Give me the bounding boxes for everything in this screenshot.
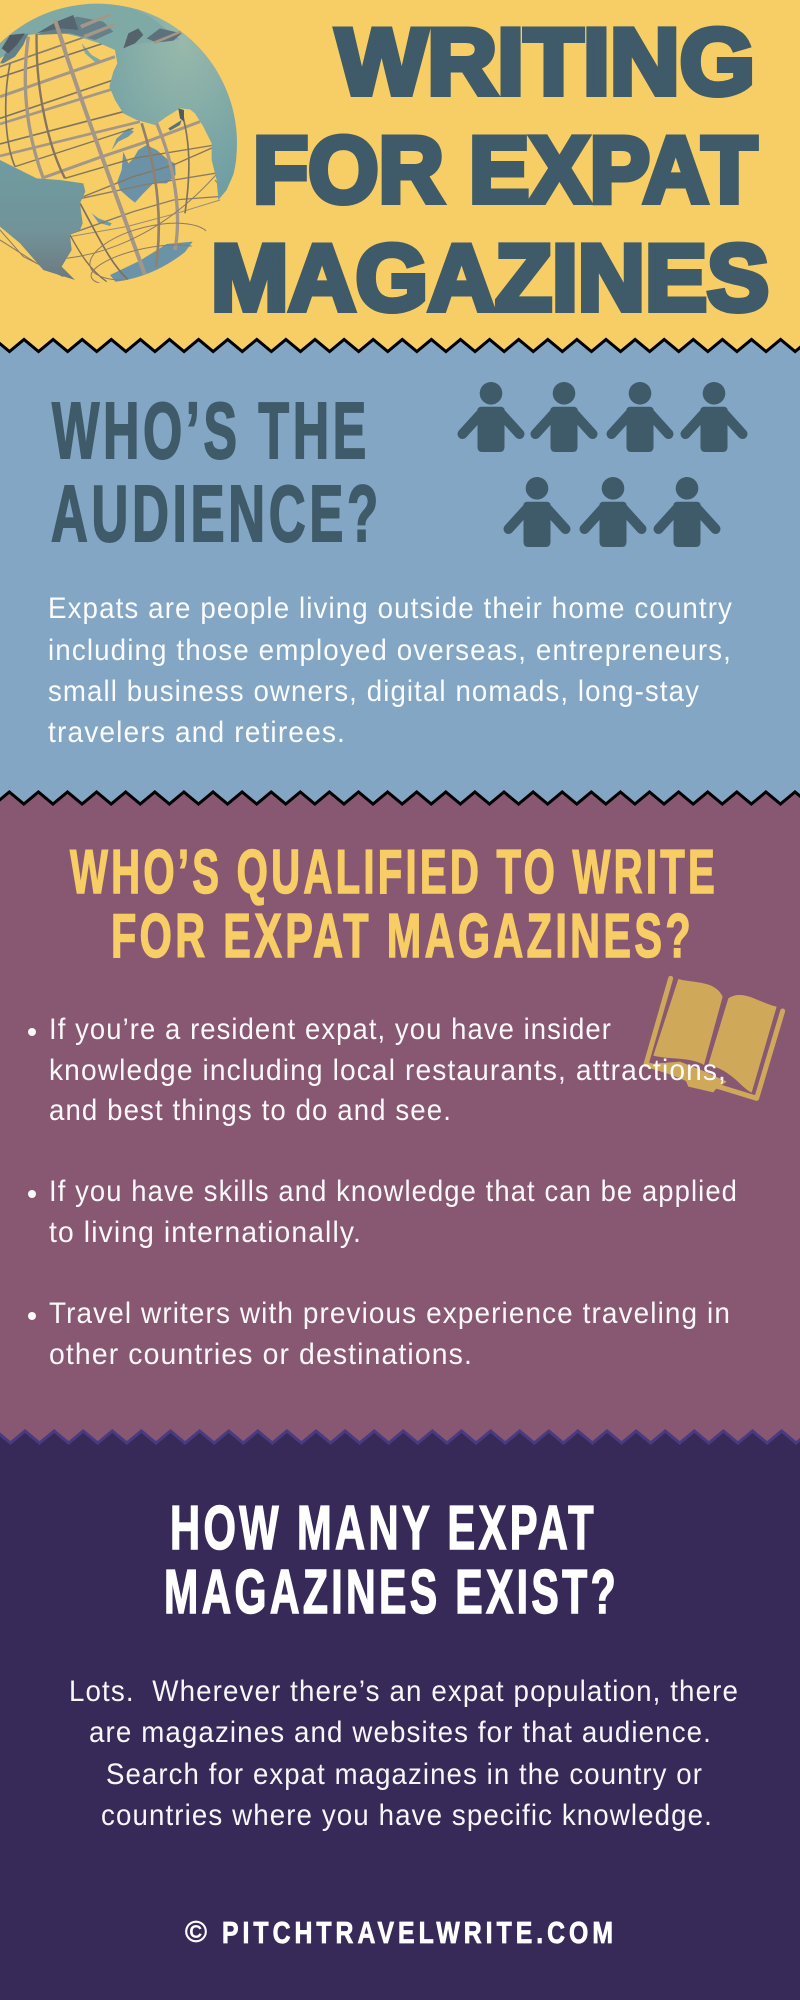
globe far-side islands xyxy=(82,43,193,283)
bullet 3: Travel writers with previous experience traveling in xyxy=(49,1297,731,1330)
title: WRITING FOR EXPAT MAGAZINES: MAGAZINES xyxy=(211,225,769,330)
text block: how many description xyxy=(69,1675,739,1832)
title: WRITING FOR EXPAT MAGAZINES: FOR EXPAT xyxy=(253,117,757,222)
heading: how many expat magazines exist xyxy=(164,1494,619,1627)
bullet 3 xyxy=(28,1297,731,1371)
text block: audience description: including those employed overseas, entrepreneurs, xyxy=(48,634,732,667)
icon: group of seven people xyxy=(462,382,742,547)
panel: how many background with zigzag edge xyxy=(0,1431,800,2000)
text block: audience description: Expats are people living outside their home country xyxy=(48,592,733,625)
bullet 3: other countries or destinations. xyxy=(49,1338,473,1371)
globe near-side land xyxy=(0,0,243,280)
bullet 2: to living internationally. xyxy=(49,1216,362,1249)
bullet 1: If you’re a resident expat, you have insider xyxy=(49,1013,612,1046)
heading: who's the audience xyxy=(51,386,382,558)
globe grid xyxy=(0,20,238,293)
text block: audience description: travelers and retirees. xyxy=(48,716,346,749)
text block: how many description: Search for expat magazines in the country or xyxy=(106,1758,703,1791)
list: qualification bullets xyxy=(28,1013,738,1371)
text block: audience description xyxy=(48,592,733,749)
heading: who's qualified xyxy=(70,838,718,971)
bullet 2 xyxy=(28,1175,738,1249)
heading: who's the audience: AUDIENCE? xyxy=(51,469,382,558)
panel: header background xyxy=(0,0,800,360)
icon: open book xyxy=(646,978,783,1098)
title: WRITING FOR EXPAT MAGAZINES xyxy=(211,9,769,330)
text block: how many description: are magazines and websites for that audience. xyxy=(89,1716,712,1749)
text block: how many description: Lots. Wherever there’s an expat population, there xyxy=(69,1675,739,1708)
footer: copyright: © xyxy=(185,1916,207,1949)
bullet 1: knowledge including local restaurants, attractions, xyxy=(49,1054,727,1087)
heading: who's the audience: WHO’S THE xyxy=(52,386,370,475)
bullet 2: If you have skills and knowledge that can be applied xyxy=(49,1175,738,1208)
text block: audience description: small business owners, digital nomads, long-stay xyxy=(48,675,700,708)
footer: copyright: PITCHTRAVELWRITE.COM xyxy=(222,1915,617,1950)
text block: how many description: countries where you have specific knowledge. xyxy=(101,1799,713,1832)
icon: wireframe globe xyxy=(0,0,243,293)
title: WRITING FOR EXPAT MAGAZINES: WRITING xyxy=(336,9,755,114)
heading: how many expat magazines exist: HOW MANY EXPAT xyxy=(170,1494,597,1563)
bullet 1 xyxy=(28,1013,727,1127)
panel: qualifications background with zigzag edge xyxy=(0,792,800,2000)
bullet 1: and best things to do and see. xyxy=(49,1094,452,1127)
